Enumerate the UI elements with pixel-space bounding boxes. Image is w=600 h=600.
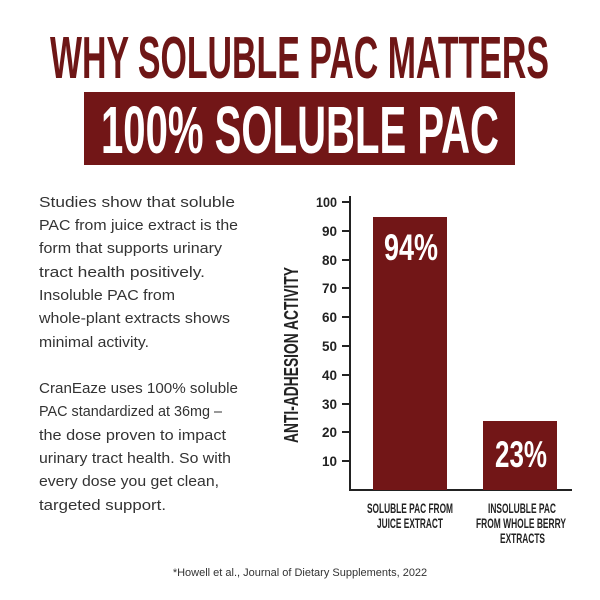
text block: body copy: urinary tract health. So with	[39, 451, 231, 467]
text block: body copy: CranEaze uses 100% soluble	[39, 381, 238, 397]
axes	[342, 196, 572, 490]
text block: body copy: form that supports urinary	[39, 241, 223, 257]
bar: insoluble 23%	[483, 421, 557, 490]
y-axis title: ANTI-ADHESION ACTIVITY	[281, 267, 303, 443]
text block: body copy: Studies show that soluble	[39, 195, 235, 211]
y tick labels: 70	[322, 280, 337, 296]
y tick labels: 50	[322, 338, 337, 354]
y tick labels: 10	[322, 453, 337, 469]
x labels: SOLUBLE PAC FROM	[367, 500, 453, 516]
text block: body copy: every dose you get clean,	[39, 474, 219, 490]
x labels	[367, 500, 566, 546]
y tick labels: 60	[322, 309, 337, 325]
y tick labels: 100	[316, 194, 337, 210]
text block: body copy: tract health positively.	[39, 265, 205, 281]
y tick labels: 40	[322, 367, 337, 383]
footnote: *Howell et al., Journal of Dietary Supplements, 2022	[173, 567, 427, 579]
x labels: INSOLUBLE PAC	[488, 500, 556, 516]
y tick labels: 30	[322, 396, 337, 412]
y tick labels: 80	[322, 252, 337, 268]
text block: body copy: Insoluble PAC from	[39, 288, 175, 304]
y tick labels: 90	[322, 223, 337, 239]
bar: soluble 94%: 94%	[384, 227, 438, 268]
y tick labels	[316, 194, 337, 469]
bar: soluble 94%	[373, 217, 447, 490]
bar: insoluble 23%: 23%	[495, 434, 547, 475]
bar chart	[281, 194, 572, 546]
text block: body copy: the dose proven to impact	[39, 428, 226, 444]
x labels: JUICE EXTRACT	[377, 515, 443, 531]
y tick labels: 20	[322, 424, 337, 440]
text block: body copy: PAC standardized at 36mg –	[39, 404, 223, 420]
x labels: EXTRACTS	[500, 530, 545, 546]
text block: body copy	[38, 195, 238, 514]
text block: body copy: whole-plant extracts shows	[38, 311, 230, 327]
text block: body copy: targeted support.	[39, 498, 166, 514]
text block: body copy: PAC from juice extract is the	[39, 218, 238, 234]
text block: body copy: minimal activity.	[39, 335, 149, 351]
